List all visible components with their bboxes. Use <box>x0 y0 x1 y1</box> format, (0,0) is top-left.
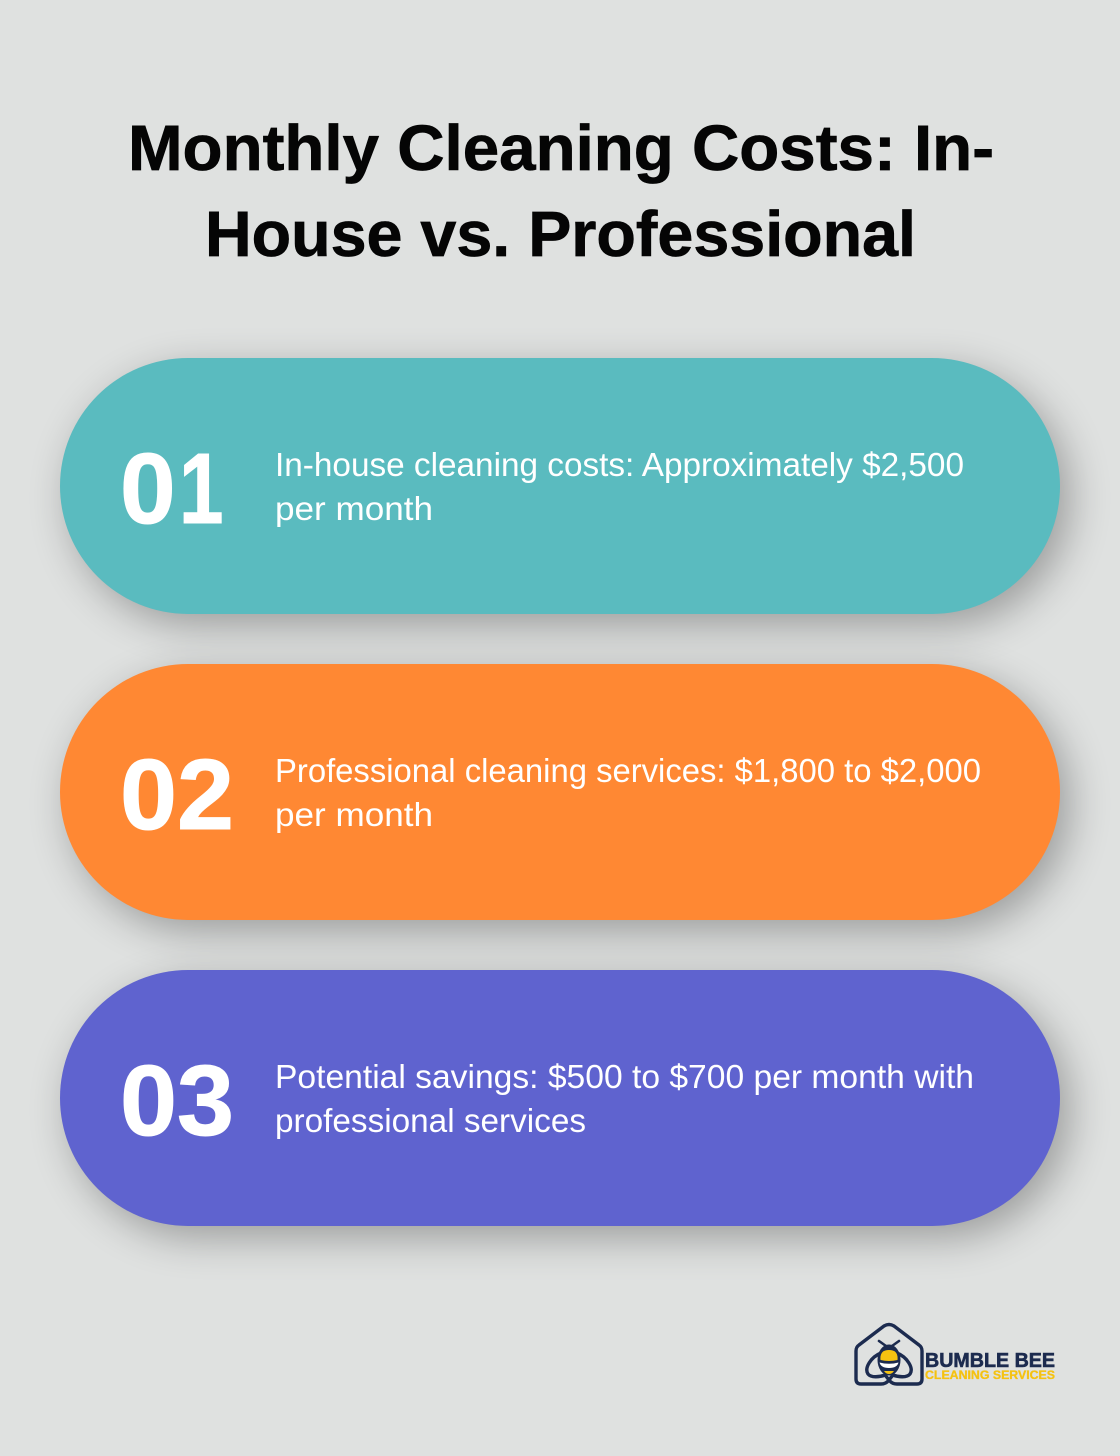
number 02: 02 <box>120 739 234 851</box>
title: Monthly Cleaning Costs: In- <box>128 112 994 184</box>
number 03: 03 <box>120 1045 234 1157</box>
logo wordmark: BUMBLE BEE <box>925 1350 1055 1372</box>
text: savings <box>275 1058 974 1139</box>
text: in-house cost: per month <box>275 490 433 527</box>
panel: professional cost pill <box>60 664 1060 920</box>
text: in-house cost <box>275 446 964 527</box>
title <box>128 112 994 270</box>
icon: house outline <box>856 1324 922 1384</box>
item 03 <box>120 1045 974 1157</box>
text: professional cost: per month <box>275 796 433 833</box>
logo: Bumble Bee Cleaning Services <box>856 1324 1055 1384</box>
title: House vs. Professional <box>205 198 916 270</box>
number 01: 1 <box>179 433 224 545</box>
item 02 <box>120 739 981 851</box>
icon: bee <box>867 1341 911 1380</box>
number 01: 0 <box>120 433 176 545</box>
text: savings: professional services <box>275 1102 586 1139</box>
panel: in-house cost pill <box>60 358 1060 614</box>
panel: savings pill <box>60 970 1060 1226</box>
logo tagline: CLEANING SERVICES <box>925 1370 1055 1382</box>
number 01 <box>120 433 224 545</box>
text: professional cost <box>275 752 981 833</box>
text: savings: Potential savings: $500 to $700 per month with <box>275 1058 974 1095</box>
text: in-house cost: In-house cleaning costs: Approximately $2,500 <box>275 446 964 483</box>
text: professional cost: Professional cleaning services: $1,800 to $2,000 <box>275 752 981 789</box>
item 01 <box>120 433 964 545</box>
